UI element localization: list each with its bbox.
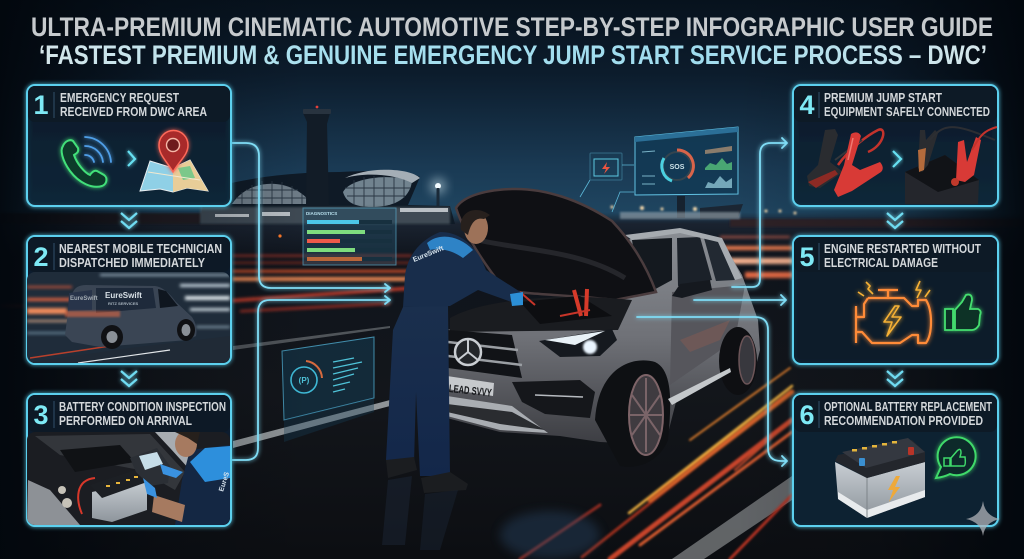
- HUD panel: diagnostics bars: DIAGNOSTICS: [306, 211, 337, 216]
- number 2: 2: [33, 242, 49, 272]
- arrow: step 3 to car: [232, 296, 390, 460]
- panel: step 3: PERFORMED ON ARRIVAL: [59, 413, 192, 428]
- number plate: [447, 376, 494, 400]
- mercedes star: [455, 339, 481, 365]
- arrow: car to step 5: [694, 295, 786, 305]
- van: EureSwift: [70, 296, 98, 302]
- chevrons: 5 to 6: [887, 371, 903, 386]
- HUD dashboard: SOS gauge: [635, 127, 738, 195]
- icon: map with location pin: [140, 130, 208, 192]
- icon: thumbs up: [945, 295, 981, 330]
- airport terminal and control tower: [200, 106, 743, 238]
- van: EureSwift: [105, 291, 142, 300]
- HUD panel: gauge readout on road: [282, 337, 374, 442]
- watermark sparkle: [966, 501, 1000, 536]
- diagnostic tablet: [130, 448, 170, 486]
- title: [31, 12, 993, 70]
- panel: step 3: [27, 394, 231, 526]
- icon: check engine light: [856, 281, 931, 343]
- number 1: 1: [33, 90, 49, 120]
- front grille: [448, 330, 522, 378]
- panel: step 2: DISPATCHED IMMEDIATELY: [59, 255, 205, 270]
- chevrons: 4 to 5: [887, 213, 903, 228]
- chevrons: 1 to 2: [121, 213, 137, 228]
- connector arrows: [232, 138, 787, 466]
- windows: [632, 238, 672, 292]
- number 3: 3: [33, 400, 49, 430]
- battery inspection photo: EureS: [218, 471, 231, 493]
- panel: step 1: RECEIVED FROM DWC AREA: [60, 104, 207, 119]
- road stripes and orange light trails: [233, 326, 792, 559]
- van: RITZ SERVICES: [108, 301, 138, 306]
- van: [65, 285, 196, 349]
- icon: thumbs-up speech bubble: [936, 437, 976, 478]
- icon: chevron: [128, 151, 135, 166]
- number 4: 4: [799, 90, 815, 120]
- step 2 heading: NEAREST MOBILE TECHNICIAN: [59, 241, 222, 256]
- panel: step 1: [27, 85, 231, 206]
- HUD panel: diagnostics bars: [303, 208, 396, 265]
- control tower: [303, 113, 330, 206]
- panel: step 6: RECOMMENDATION PROVIDED: [824, 413, 983, 428]
- arrow: car to step 6: [637, 317, 787, 466]
- step 1 heading: EMERGENCY REQUEST: [60, 90, 179, 105]
- lower bumper: [447, 396, 548, 433]
- icon: phone with signal waves: [62, 137, 111, 187]
- technician in blue uniform: [382, 210, 523, 550]
- step 5 heading: ENGINE RESTARTED WITHOUT: [824, 241, 981, 256]
- rear wheel: [719, 327, 757, 395]
- number plate: LEAD SVVY: [448, 383, 493, 400]
- HUD panel: gauge readout on road: (P): [299, 376, 310, 385]
- battery: [92, 480, 147, 522]
- headlight: [539, 329, 617, 357]
- arrow: step 1 to car: [232, 143, 390, 292]
- panel: step 6: [793, 394, 1000, 536]
- panel: step 5: [793, 236, 998, 364]
- battery inspection photo: [27, 431, 231, 525]
- light trails behind car: [0, 236, 795, 312]
- panel: step 4: [793, 85, 998, 206]
- icon: battery with clamps: [905, 127, 997, 204]
- car: silver SUV with open hood: [447, 189, 760, 467]
- van photo with motion blur: [25, 272, 230, 363]
- icon: car battery: [835, 438, 925, 518]
- arrow: car to step 4: [732, 138, 787, 287]
- HUD dashboard: SOS gauge: SOS: [670, 164, 685, 171]
- front wheel: [595, 360, 670, 467]
- door reflections: [670, 285, 745, 385]
- icon: jumper cable clamps: [807, 129, 883, 197]
- number 5: 5: [799, 242, 815, 272]
- technician in blue uniform: EureSwift: [412, 245, 445, 264]
- icon: chevron: [893, 151, 901, 167]
- HUD icon: battery alert: [580, 153, 634, 212]
- engine bay: [450, 297, 632, 332]
- open hood: [456, 189, 656, 300]
- chevrons: 2 to 3: [121, 371, 137, 386]
- step 3 heading: BATTERY CONDITION INSPECTION: [59, 399, 226, 414]
- panel: step 2: [25, 236, 231, 364]
- panel: step 5: ELECTRICAL DAMAGE: [824, 255, 938, 270]
- side mirror: [672, 280, 712, 298]
- step 4 heading: PREMIUM JUMP START: [824, 90, 942, 105]
- number 6: 6: [799, 400, 815, 430]
- technician: [175, 445, 230, 525]
